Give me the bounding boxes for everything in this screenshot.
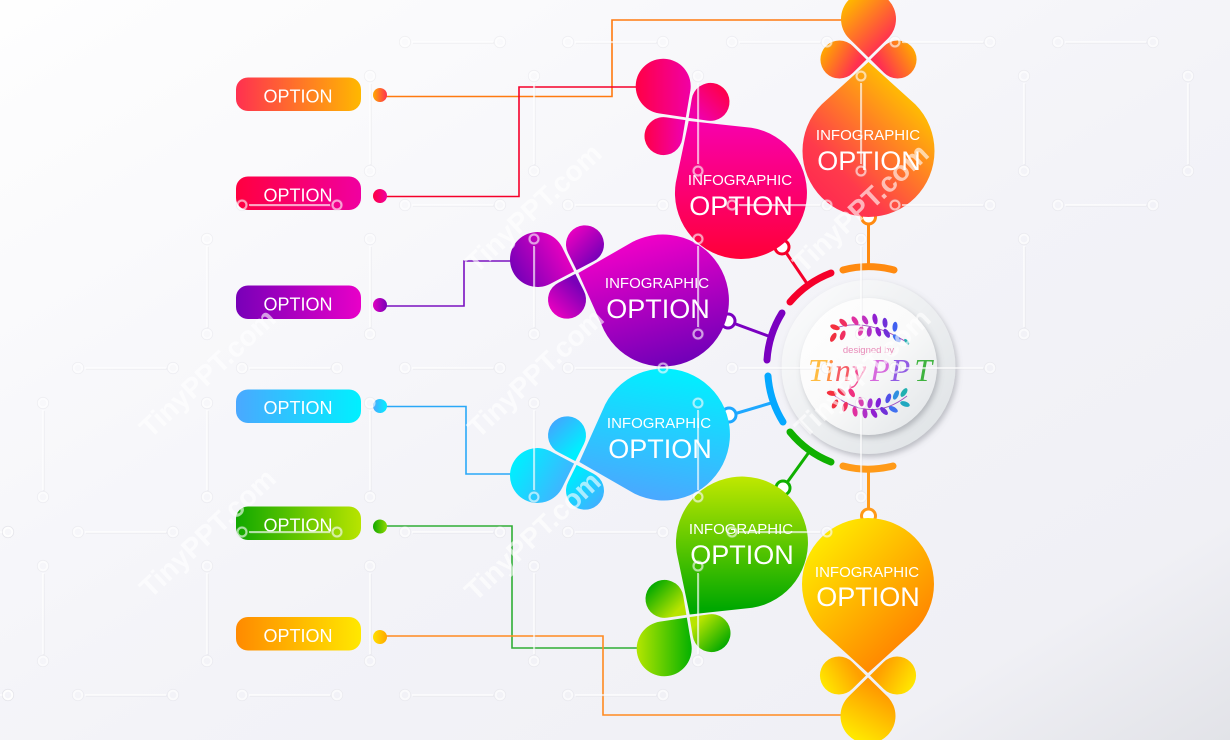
drop: purple — [503, 210, 746, 384]
drop: orange top — [802, 0, 934, 217]
dot 2 — [373, 189, 387, 203]
pill 5: OPTION — [263, 516, 333, 536]
connector: green — [776, 448, 812, 495]
connector: purple — [721, 314, 771, 337]
line: orange top — [380, 20, 845, 96]
centre disc with logo — [782, 280, 956, 454]
drop labels — [605, 127, 921, 612]
pill 1: OPTION — [263, 86, 333, 106]
arc: red — [790, 273, 831, 302]
label: magenta — [688, 172, 793, 221]
dot 3 — [373, 298, 387, 312]
drop: blue — [503, 351, 747, 525]
watermark 2: TinyPPT.com — [133, 462, 282, 604]
label: blue: OPTION — [608, 434, 712, 464]
watermark 3: TinyPPT.com — [459, 137, 608, 279]
dot 6 — [373, 630, 387, 644]
label: orange top — [816, 127, 921, 176]
connector rings and stems — [721, 210, 876, 523]
label: purple: OPTION — [606, 294, 710, 324]
logo: bottom wreath — [826, 387, 911, 419]
pill 2: OPTION — [263, 186, 333, 206]
label: orange top: OPTION — [817, 146, 921, 176]
petals: orange top — [820, 0, 917, 79]
watermark 7: TinyPPT.com — [788, 302, 937, 444]
logo: TinyPPT script: TinyPPT — [808, 352, 934, 388]
connector: orange bottom — [862, 466, 876, 523]
label: blue — [607, 415, 712, 464]
dot 4 — [373, 399, 387, 413]
watermark 4: TinyPPT.com — [461, 302, 610, 444]
connector: blue — [722, 403, 771, 422]
label: blue: INFOGRAPHIC — [607, 415, 711, 432]
label: purple — [605, 275, 710, 324]
arc: blue — [768, 376, 783, 422]
outer disc — [782, 280, 956, 454]
petals: yellow — [820, 656, 916, 740]
line: purple — [380, 261, 514, 306]
label: magenta: OPTION — [689, 191, 793, 221]
drop: yellow — [802, 518, 934, 740]
label: green: OPTION — [690, 540, 794, 570]
pill 1 — [236, 78, 361, 111]
watermarks — [133, 137, 937, 607]
watermark 6: TinyPPT.com — [786, 137, 935, 279]
line: green — [380, 526, 640, 648]
leader lines — [380, 20, 845, 715]
label: yellow: OPTION — [816, 582, 920, 612]
label: orange top: INFOGRAPHIC — [816, 127, 920, 144]
pill 6 — [236, 617, 361, 650]
watermark 5: TinyPPT.com — [458, 465, 607, 607]
connector: orange top — [862, 210, 876, 268]
pill 2 — [236, 176, 361, 210]
label: purple: INFOGRAPHIC — [605, 275, 709, 292]
petals: purple — [503, 220, 609, 324]
line: red — [380, 87, 640, 196]
pill 5 — [236, 506, 361, 540]
option dots — [373, 88, 387, 644]
petals: green — [626, 572, 738, 687]
connector: red — [775, 240, 810, 288]
ring arc segments around centre — [767, 267, 894, 469]
dot 1 — [373, 88, 387, 102]
arc: purple — [767, 313, 782, 360]
dot 5 — [373, 520, 387, 534]
pill 6: OPTION — [263, 626, 333, 646]
label: yellow: INFOGRAPHIC — [815, 564, 919, 581]
line: orange bottom — [380, 636, 845, 715]
line: blue — [380, 406, 515, 474]
drop: magenta — [625, 48, 833, 285]
logo: top wreath — [829, 313, 910, 345]
pill 4 — [236, 390, 361, 423]
logo: designed by: designed by — [843, 345, 894, 356]
arc: orange top — [843, 267, 894, 270]
pill 4: OPTION — [263, 398, 333, 418]
watermark 1: TinyPPT.com — [133, 302, 282, 444]
label: magenta: INFOGRAPHIC — [688, 172, 792, 189]
label: green — [689, 521, 794, 570]
option pills — [236, 78, 361, 650]
petals: blue — [503, 411, 609, 515]
drop: green — [626, 450, 834, 687]
petals: magenta — [625, 48, 737, 163]
arc: orange bottom — [843, 466, 893, 469]
pill 3: OPTION — [263, 294, 333, 314]
inner disc — [800, 298, 937, 435]
label: green: INFOGRAPHIC — [689, 521, 793, 538]
pill 3 — [236, 286, 361, 319]
label: yellow — [815, 564, 920, 612]
arc: green — [790, 432, 831, 462]
